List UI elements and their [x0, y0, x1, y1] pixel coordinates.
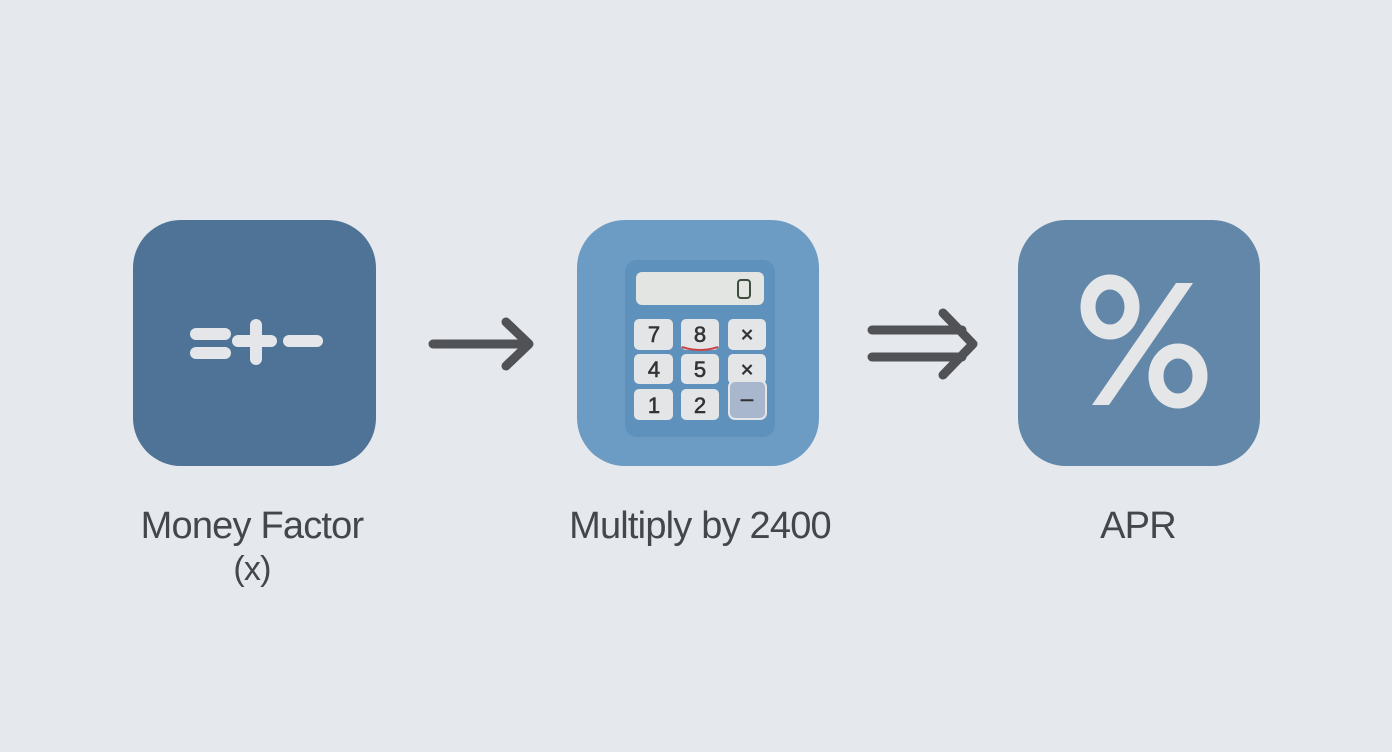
panel: money factor icon: [133, 220, 376, 466]
arrow: single: [433, 322, 529, 366]
panel: calculator icon: 1: [648, 393, 660, 418]
panel: calculator icon: 7: [648, 322, 660, 347]
panel: calculator icon: ×: [741, 322, 753, 347]
panel: calculator icon: [577, 220, 819, 466]
panel: calculator icon: ×: [741, 357, 753, 382]
label: money factor: Money Factor: [141, 505, 363, 547]
panel: calculator icon: 8: [694, 322, 706, 347]
panel: calculator icon: 5: [694, 357, 706, 382]
arrow: double: [872, 313, 973, 375]
panel: calculator icon: 2: [694, 393, 706, 418]
panel: calculator icon: 4: [648, 357, 660, 382]
label: money factor: [141, 505, 364, 588]
label: apr: APR: [1100, 505, 1176, 547]
panel: percent icon: [1018, 220, 1260, 466]
panel: calculator icon: –: [741, 386, 754, 411]
label: money factor: (x): [233, 550, 271, 588]
label: multiply: Multiply by 2400: [569, 505, 831, 547]
